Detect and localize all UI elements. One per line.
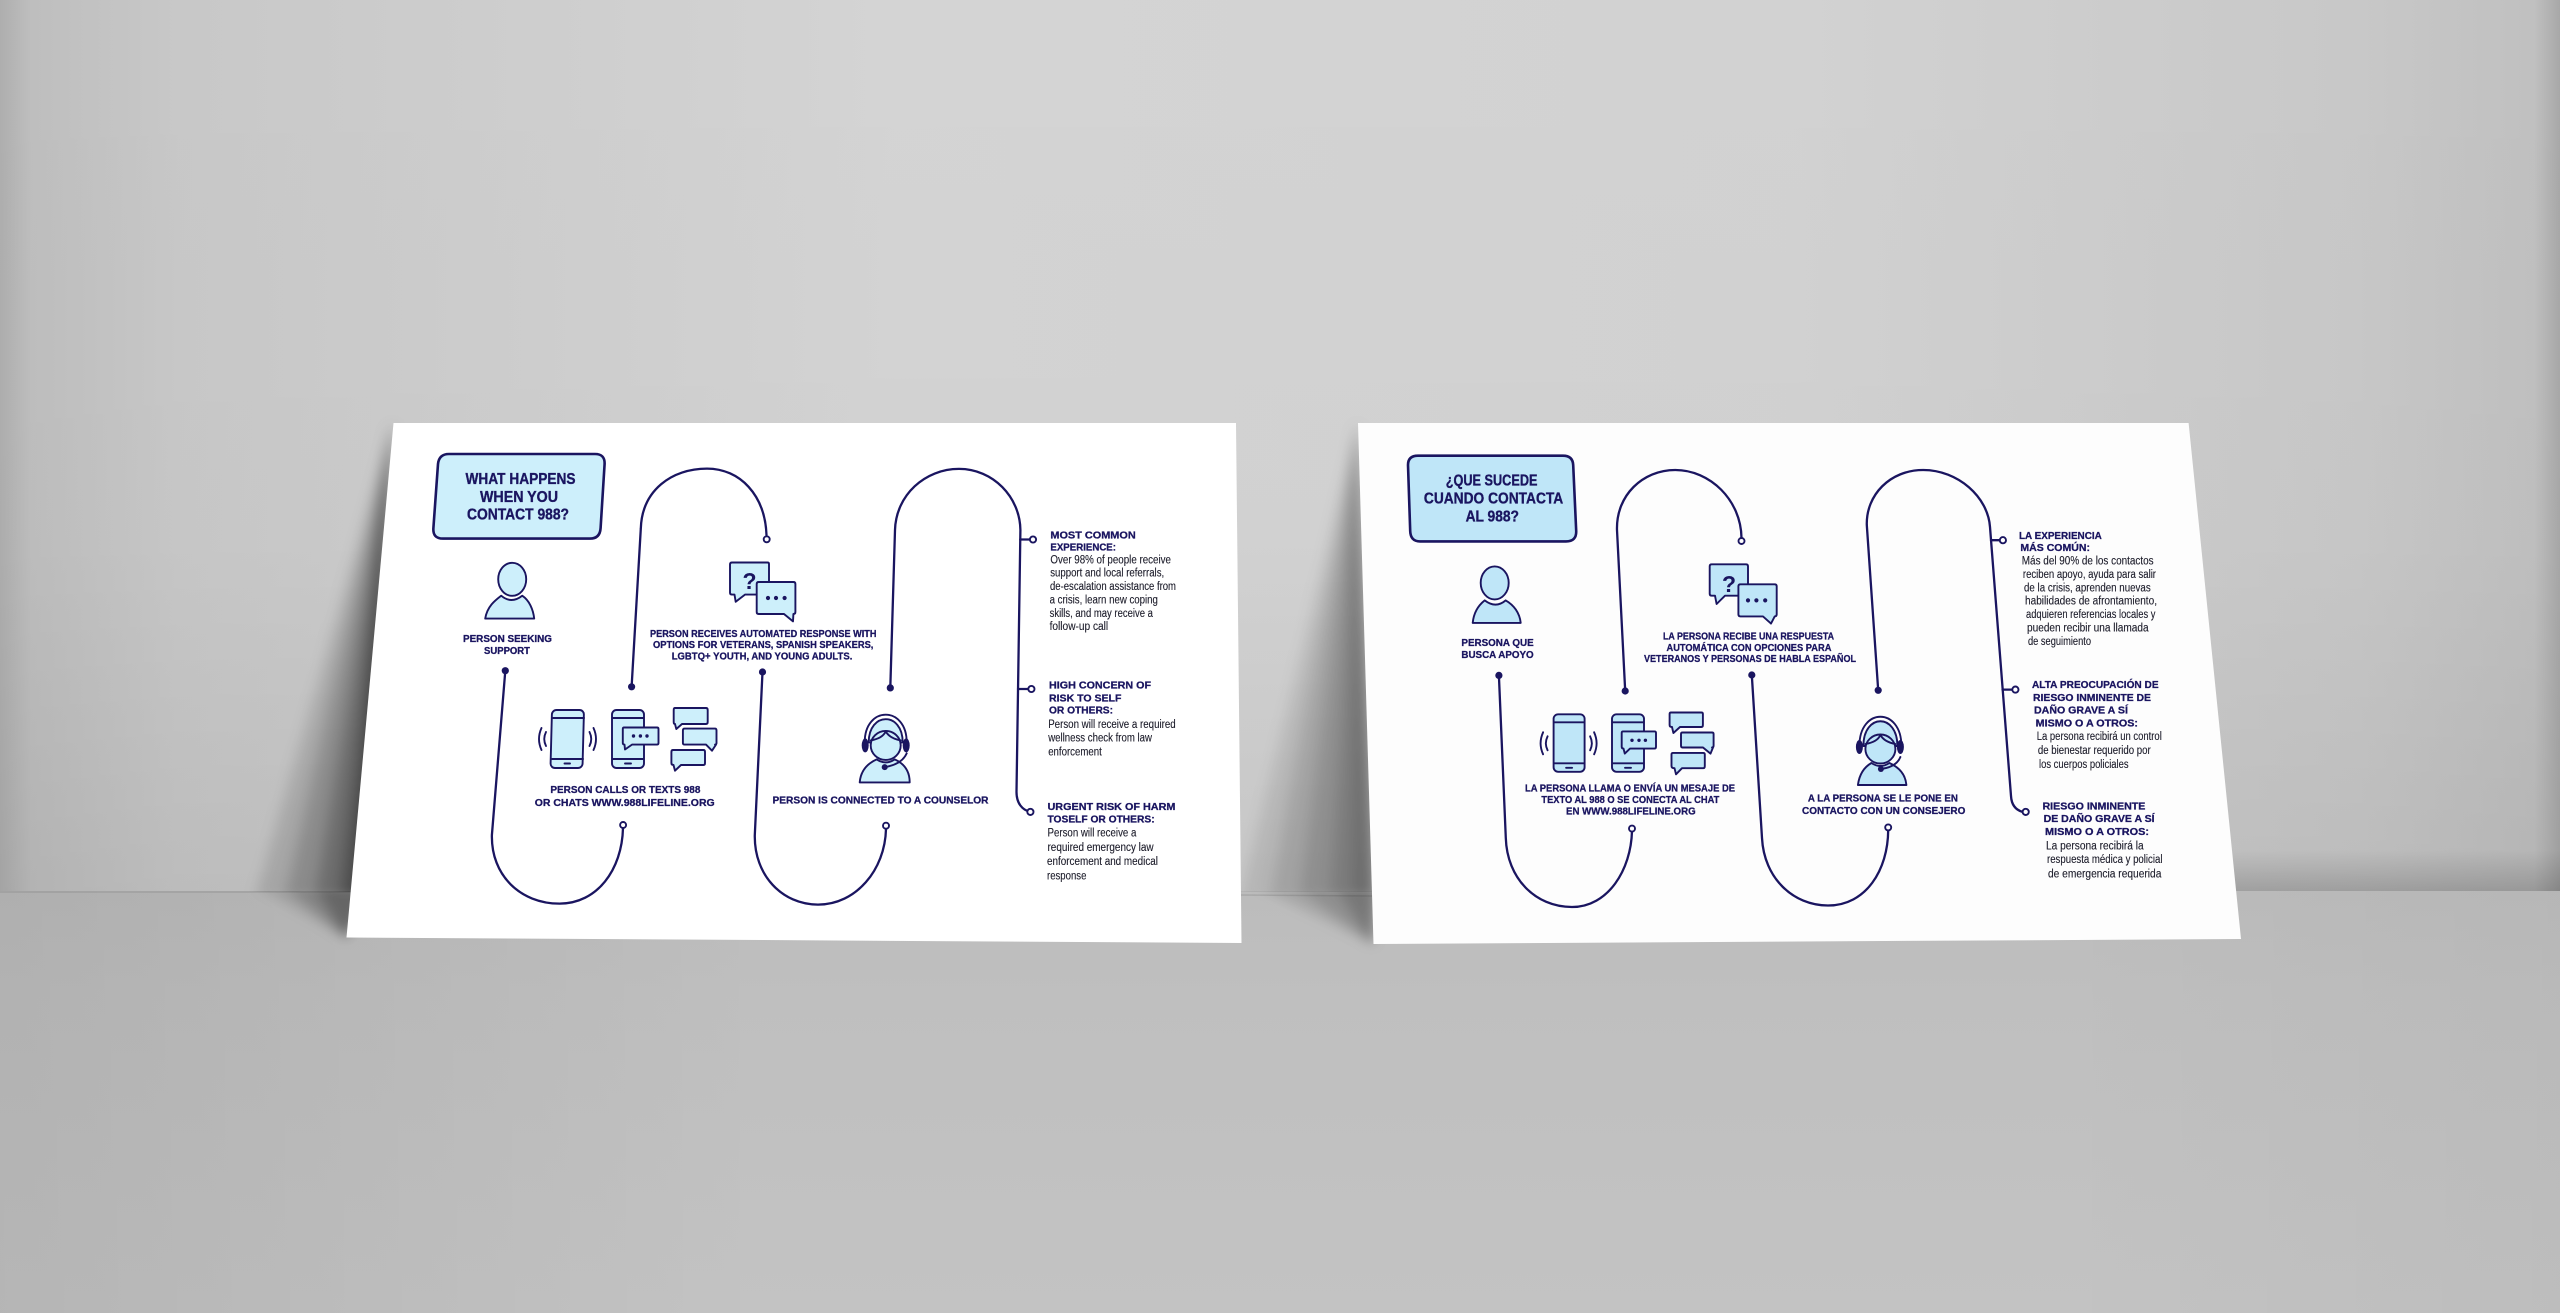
label: automated response: OPTIONS FOR VETERANS, SPANISH SPEAKERS, (653, 639, 873, 651)
text: urgent risk of harm: de emergencia requerida (2048, 868, 2162, 880)
text: urgent risk of harm: URGENT RISK OF HARM (1048, 801, 1176, 813)
text: most common experience: de la crisis, aprenden nuevas (2024, 582, 2151, 594)
text: urgent risk of harm: TOSELF OR OTHERS: (1048, 814, 1155, 826)
text: urgent risk of harm: MISMO O A OTROS: (2045, 826, 2149, 838)
label: automated response: VETERANOS Y PERSONAS DE HABLA ESPAÑOL (1644, 652, 1857, 665)
text: most common experience: Más del 90% de los contactos (2022, 556, 2154, 568)
floor background (0, 891, 2560, 1313)
text: urgent risk of harm: RIESGO INMINENTE (2042, 800, 2145, 812)
text: most common experience: EXPERIENCE: (1050, 542, 1116, 554)
text: most common experience: de-escalation assistance from (1050, 581, 1176, 593)
label: person seeking support (1461, 637, 1534, 661)
text: most common experience: adquieren referencias locales y (2026, 609, 2156, 621)
title box: ¿QUE SUCEDE (1446, 473, 1538, 490)
title box: AL 988? (1466, 508, 1519, 525)
label: calls or texts: TEXTO AL 988 O SE CONECTA AL CHAT (1541, 794, 1720, 806)
text: most common experience: a crisis, learn new coping (1050, 594, 1158, 606)
text: urgent risk of harm: required emergency law (1048, 842, 1154, 854)
icon: person seeking support (1473, 566, 1521, 623)
shadows on wall and floor (0, 423, 1376, 944)
text: high concern of risk: wellness check from law (1047, 733, 1153, 745)
icon: phone with text message (1612, 714, 1656, 772)
icon: automated response bubbles (730, 562, 795, 621)
icon: chat bubbles (671, 708, 716, 771)
label: calls or texts: LA PERSONA LLAMA O ENVÍA UN MESAJE DE (1525, 781, 1735, 794)
text: high concern of risk: ALTA PREOCUPACIÓN DE (2032, 678, 2159, 691)
text: high concern of risk: enforcement (1048, 746, 1102, 758)
text: most common experience (2019, 530, 2157, 648)
icon: counselor with headset (1856, 717, 1906, 785)
text: high concern of risk: OR OTHERS: (1049, 705, 1113, 717)
card sheet (346, 423, 1242, 943)
path: step 3 to step 4 (1748, 671, 1891, 906)
text: high concern of risk: La persona recibirá un control (2037, 731, 2162, 743)
text: high concern of risk: los cuerpos policiales (2039, 759, 2129, 771)
label: calls or texts (535, 784, 715, 809)
label: calls or texts (1525, 781, 1735, 818)
title box: CONTACT 988? (467, 507, 569, 524)
text: most common experience: pueden recibir una llamada (2027, 622, 2149, 634)
text: high concern of risk: RIESGO INMINENTE DE (2033, 692, 2151, 704)
label: connected to a counselor: PERSON IS CONNECTED TO A COUNSELOR (772, 794, 989, 806)
text: most common experience: LA EXPERIENCIA (2019, 530, 2102, 542)
label: automated response: LGBTQ+ YOUTH, AND YOUNG ADULTS. (672, 650, 852, 662)
icon: phone with text message (612, 710, 658, 768)
title box (433, 454, 605, 539)
title box: WHEN YOU (480, 489, 558, 506)
card sheet (1358, 423, 2241, 944)
text: urgent risk of harm: DE DAÑO GRAVE A SÍ (2044, 812, 2156, 825)
label: automated response (650, 628, 876, 662)
label: connected to a counselor: CONTACTO CON UN CONSEJERO (1802, 805, 1965, 817)
text: most common experience: skills, and may receive a (1050, 608, 1153, 620)
icon: chat bubbles (1670, 712, 1714, 774)
icon: automated response bubbles: ? (1722, 571, 1736, 597)
label: automated response: LA PERSONA RECIBE UNA RESPUESTA (1663, 630, 1834, 642)
text: urgent risk of harm: Person will receive a (1048, 828, 1137, 840)
text: most common experience: support and local referrals, (1050, 568, 1164, 580)
title box (1408, 456, 1576, 541)
text: high concern of risk (1047, 680, 1176, 758)
icon: person seeking support (485, 563, 534, 619)
path: step 3 to step 4 (755, 668, 889, 905)
label: automated response: PERSON RECEIVES AUTOMATED RESPONSE WITH (650, 628, 876, 640)
label: calls or texts: EN WWW.988LIFELINE.ORG (1566, 806, 1696, 818)
label: calls or texts: OR CHATS WWW.988LIFELINE.ORG (535, 797, 715, 809)
label: person seeking support: BUSCA APOYO (1461, 649, 1534, 661)
panel: Spanish card (1358, 423, 2241, 944)
text: high concern of risk: MISMO O A OTROS: (2036, 718, 2138, 730)
text: high concern of risk: de bienestar requerido por (2038, 745, 2151, 757)
text: urgent risk of harm (2042, 800, 2162, 880)
text: urgent risk of harm: response (1047, 871, 1086, 883)
path: step 2 to step 3 (628, 469, 770, 690)
label: person seeking support: PERSON SEEKING (463, 633, 552, 645)
label: automated response (1644, 630, 1857, 665)
icon: phone ringing (1541, 714, 1597, 772)
text: high concern of risk: HIGH CONCERN OF (1049, 680, 1152, 692)
text: urgent risk of harm (1047, 801, 1176, 883)
label: person seeking support (463, 633, 552, 657)
icon: phone ringing (539, 710, 596, 768)
path: step 1 to step 2 (492, 667, 626, 904)
text: high concern of risk (2032, 678, 2162, 771)
text: urgent risk of harm: enforcement and medical (1047, 856, 1158, 868)
text: most common experience: habilidades de afrontamiento, (2025, 596, 2157, 608)
label: connected to a counselor (1802, 792, 1965, 817)
text: most common experience: reciben apoyo, ayuda para salir (2023, 569, 2156, 581)
title box: CUANDO CONTACTA (1424, 491, 1563, 508)
text: urgent risk of harm: La persona recibirá la (2046, 840, 2144, 852)
label: automated response: AUTOMÁTICA CON OPCIONES PARA (1666, 641, 1832, 654)
title box: WHAT HAPPENS (466, 471, 576, 488)
text: urgent risk of harm: respuesta médica y policial (2047, 854, 2162, 866)
text: most common experience: MOST COMMON (1050, 530, 1136, 542)
wall background (0, 0, 2560, 892)
text: high concern of risk: RISK TO SELF (1049, 692, 1122, 704)
path: step 4 to outcomes (1867, 470, 2029, 815)
text: most common experience: de seguimiento (2028, 636, 2091, 648)
text: most common experience: follow-up call (1050, 621, 1108, 633)
text: most common experience: Over 98% of people receive (1050, 554, 1171, 566)
panel: English card (346, 423, 1242, 943)
label: connected to a counselor: A LA PERSONA SE LE PONE EN (1808, 792, 1958, 804)
path: step 4 to outcomes (887, 469, 1036, 815)
label: person seeking support: SUPPORT (484, 645, 531, 657)
icon: counselor with headset (860, 715, 910, 782)
text: most common experience (1050, 530, 1176, 633)
label: person seeking support: PERSONA QUE (1461, 637, 1534, 649)
text: most common experience: MÁS COMÚN: (2020, 541, 2090, 554)
icon: automated response bubbles (1710, 564, 1777, 624)
text: high concern of risk: Person will receive a required (1048, 719, 1176, 731)
text: high concern of risk: DAÑO GRAVE A SÍ (2034, 704, 2129, 717)
label: calls or texts: PERSON CALLS OR TEXTS 988 (550, 784, 701, 796)
path: step 1 to step 2 (1495, 672, 1635, 907)
icon: automated response bubbles: ? (742, 568, 757, 594)
path: step 2 to step 3 (1617, 470, 1744, 695)
